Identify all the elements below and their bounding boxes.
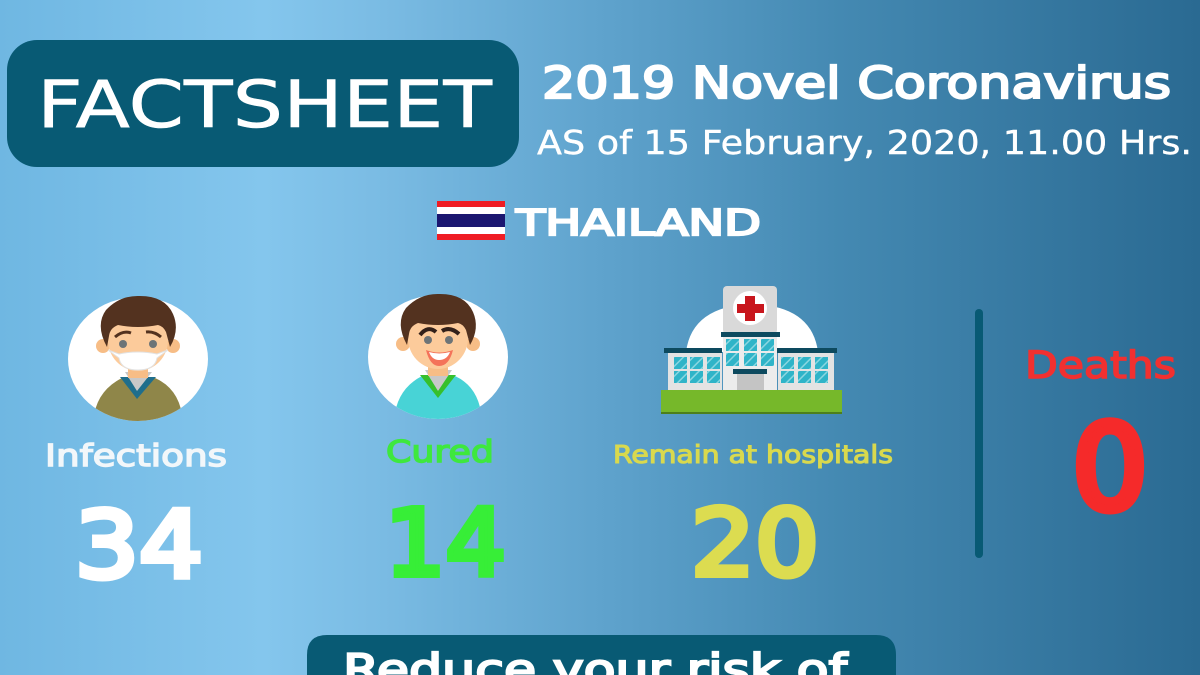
- stat: cured: [385, 435, 506, 597]
- hair: [401, 294, 476, 345]
- windows: [674, 339, 828, 383]
- ears: [96, 339, 110, 353]
- icon: hospital: [661, 286, 842, 414]
- stat: remain at hospitals: Remain at hospitals: [613, 440, 893, 469]
- stat: deaths: Deaths: [1025, 344, 1176, 387]
- stat: cured: Cured: [386, 435, 494, 470]
- icon: masked person: [68, 296, 208, 425]
- title badge: factsheet: [7, 40, 519, 167]
- divider: [975, 309, 983, 558]
- ears: [396, 337, 410, 351]
- stat: remain at hospitals: [613, 440, 893, 597]
- heading: 2019 Novel Coronavirus: 2019 Novel Coronavirus: [542, 58, 1171, 109]
- stat: infections: [45, 439, 227, 599]
- face mask: [108, 350, 168, 370]
- banner: reduce your risk: [307, 635, 896, 675]
- stat: infections: Infections: [45, 439, 227, 474]
- title badge: factsheet: FACTSHEET: [37, 68, 492, 143]
- country label: Thailand: THAILAND: [515, 203, 761, 244]
- country label: Thailand: [437, 201, 761, 244]
- stat: cured: 14: [385, 490, 506, 597]
- hair: [101, 296, 176, 347]
- icon: Thai flag: [437, 201, 505, 240]
- stat: infections: 34: [75, 492, 203, 599]
- icon: smiling person: [368, 294, 508, 423]
- stat: deaths: 0: [1072, 399, 1148, 537]
- stat: remain at hospitals: 20: [691, 490, 819, 597]
- date line: AS of 15 February, 2020, 11.00 Hrs.: [537, 123, 1192, 162]
- stat: deaths: [1025, 344, 1176, 537]
